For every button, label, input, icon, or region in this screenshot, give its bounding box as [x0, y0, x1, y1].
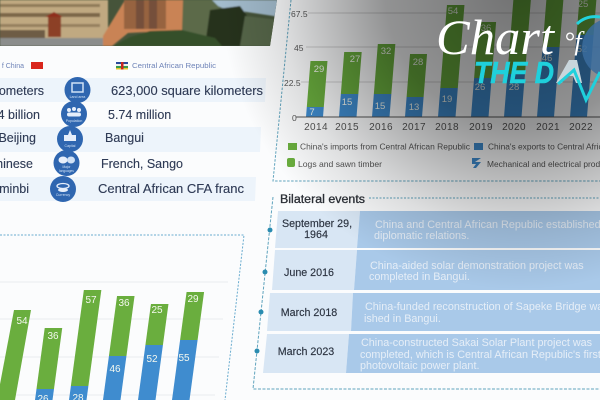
event row 4: photovoltaic power plant. — [360, 360, 479, 372]
event row 4: China-constructed Sakai Solar Plant project was — [361, 337, 593, 349]
bar value labels, upper chart: 28 — [413, 57, 423, 68]
bar value labels, upper chart: 52 — [577, 44, 587, 55]
event row 2: completed in Bangui. — [369, 271, 470, 283]
event row 1: diplomatic relations. — [374, 230, 469, 242]
chart legend — [287, 142, 600, 169]
event row 4 — [263, 334, 600, 373]
event row 1: September 29, — [282, 218, 352, 230]
x axis years: 2014 — [304, 122, 328, 133]
table header — [2, 62, 217, 70]
table row text: ometers — [0, 84, 44, 98]
table row text: 5.74 million — [108, 108, 171, 122]
icon: major languages — [54, 150, 80, 176]
icon: major languages: Major — [63, 165, 71, 169]
table row text — [0, 84, 263, 196]
x axis years: 2018 — [435, 122, 459, 133]
bar value labels, upper chart: 15 — [375, 101, 385, 112]
chart legend: Logs and sawn timber — [298, 159, 382, 169]
table row text: minbi — [0, 182, 29, 196]
x axis years: 2017 — [402, 122, 426, 133]
bar value labels, upper chart: 26 — [475, 82, 485, 93]
icon: major languages: languages — [59, 169, 74, 173]
event row 2 — [272, 250, 600, 290]
table row text: French, Sango — [101, 157, 183, 171]
x axis years: 2022 — [569, 122, 593, 133]
table header: Central African Republic — [132, 63, 217, 70]
event row 2: June 2016 — [284, 267, 334, 279]
bar value labels, lower chart: 57 — [85, 295, 97, 306]
icon: land area: Land area — [70, 95, 85, 99]
icon: land area — [64, 77, 90, 103]
table header: f China — [2, 63, 24, 70]
event row 2: China-aided solar demonstration project was — [370, 260, 584, 272]
bar value labels, lower chart: 55 — [178, 353, 190, 364]
bar value labels, lower chart: 46 — [109, 364, 121, 375]
table row text: Central African CFA franc — [98, 182, 244, 196]
bar value labels, upper chart: 19 — [442, 94, 452, 105]
bar value labels, lower chart: 29 — [187, 294, 199, 305]
bar value labels, upper chart: 29 — [314, 64, 324, 75]
x axis years: 2019 — [469, 122, 493, 133]
photo banner — [0, 0, 280, 46]
event row 4: March 2023 — [278, 346, 334, 358]
icon: currency — [50, 176, 76, 202]
logo: Chart of the Day: THE D — [474, 55, 554, 90]
bar value labels, upper chart: 15 — [342, 97, 352, 108]
event row 3 — [267, 293, 600, 331]
panel: country comparison table — [0, 62, 266, 202]
logo: Chart of the Day: Chart — [436, 9, 555, 65]
bar value labels, upper chart: 36 — [481, 23, 491, 34]
x axis years — [304, 122, 593, 133]
icon: currency: Currency — [56, 193, 70, 197]
bar value labels, lower chart: 54 — [16, 316, 28, 327]
bar value labels, lower chart — [16, 294, 199, 400]
heading: Bilateral events — [280, 194, 365, 206]
event row 1 — [275, 211, 600, 248]
bar value labels, upper chart: 46 — [542, 53, 552, 64]
x axis years: 2020 — [502, 122, 526, 133]
bar value labels, lower chart: 52 — [146, 354, 158, 365]
bar value labels, upper chart: 32 — [381, 46, 391, 57]
icon: capital: Capital — [65, 144, 76, 148]
timeline dots — [254, 228, 272, 354]
chart legend: China's imports from Central African Republic — [300, 142, 470, 152]
y axis gridlines and labels: 45 — [294, 43, 304, 53]
event row 3: March 2018 — [281, 307, 337, 319]
bar value labels, upper chart: 13 — [409, 102, 419, 113]
bar value labels, lower chart: 36 — [118, 298, 130, 309]
y axis gridlines and labels: 0 — [292, 113, 297, 123]
bar value labels, upper chart: 28 — [509, 82, 519, 93]
bar value labels, upper chart: 7 — [309, 107, 315, 118]
bar value labels, lower chart: 25 — [151, 305, 163, 316]
table row text: Bangui — [105, 131, 144, 145]
panel: bilateral events — [253, 194, 600, 389]
event row 3: ished in Bangui. — [364, 313, 441, 325]
icon: population: Population — [66, 119, 82, 123]
panel: trade chart, upper right — [273, 0, 600, 181]
bar value labels, upper chart — [309, 0, 588, 118]
bar value labels, lower chart: 36 — [47, 331, 59, 342]
logo: Chart of the Day — [436, 9, 600, 100]
bar value labels, upper chart: 27 — [350, 54, 360, 65]
y axis gridlines and labels: 22.5 — [284, 78, 301, 88]
x axis years: 2016 — [369, 122, 393, 133]
icon: capital — [57, 126, 83, 152]
event row 1: 1964 — [304, 229, 328, 241]
logo: Chart of the Day: °f — [564, 27, 585, 56]
x axis years: 2021 — [536, 122, 560, 133]
table row backgrounds — [0, 78, 266, 201]
x axis years: 2015 — [335, 122, 359, 133]
stacked bars, lower chart — [0, 290, 204, 400]
y axis gridlines and labels — [284, 9, 600, 123]
panel: trade chart, lower left — [0, 235, 244, 400]
table row text: 623,000 square kilometers — [111, 84, 263, 98]
event row 4: completed, which is Central African Republic's first — [360, 349, 600, 361]
icon: population — [61, 101, 87, 127]
stacked bars, upper chart — [306, 0, 598, 117]
bar value labels, upper chart: 54 — [448, 6, 458, 17]
y axis gridlines and labels: 67.5 — [291, 9, 308, 19]
